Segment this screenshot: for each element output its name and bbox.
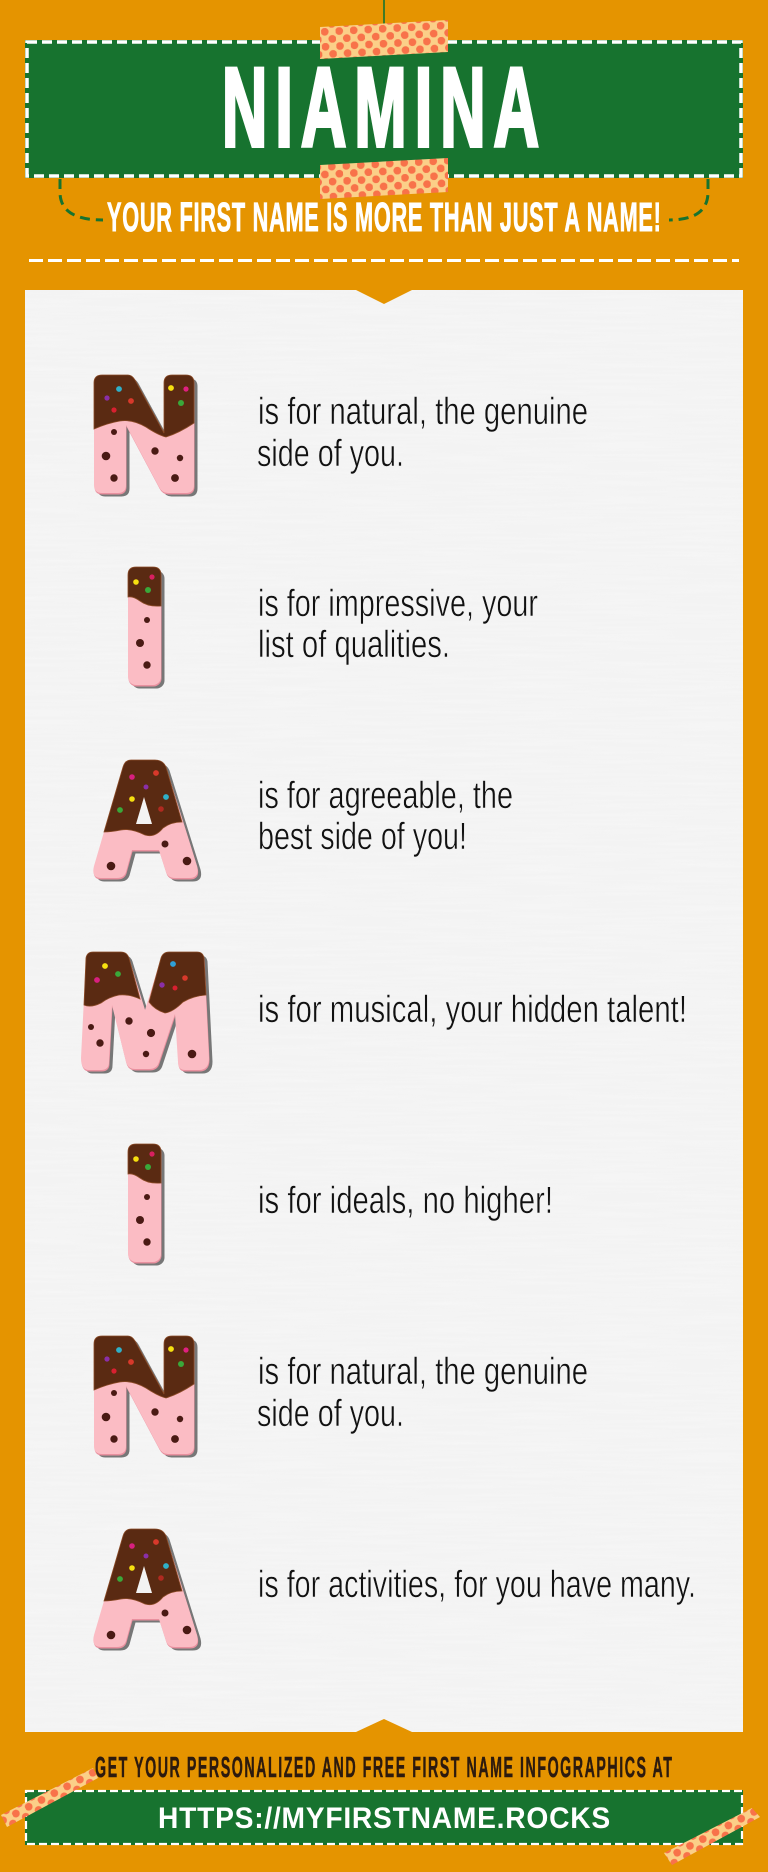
text row 6 [257,1351,588,1435]
text row 3: best side of you! [258,816,467,858]
subtitle: YOUR FIRST NAME IS MORE THAN JUST A NAME! [107,194,661,240]
letter M [81,952,212,1074]
text row 1: is for natural, the genuine [258,391,588,433]
tape: footer left [1,1768,98,1827]
letter A (2) [93,1529,201,1650]
thread [383,0,385,25]
letter N (1) [94,375,198,496]
footer call to action: GET YOUR PERSONALIZED AND FREE FIRST NAME INFOGRAPHICS AT [95,1752,672,1783]
text row 6: is for natural, the genuine [258,1351,588,1393]
tape: bottom [320,158,448,199]
dashed divider [29,259,739,262]
tape: footer right [664,1808,760,1865]
footer url: HTTPS://MYFIRSTNAME.ROCKS [158,1802,610,1835]
letter A (1) [93,760,201,882]
curved connector: left [60,179,103,220]
text row 2: is for impressive, your [258,583,538,625]
text row 3 [258,775,513,858]
text row 3: is for agreeable, the [258,775,513,817]
text row 2: list of qualities. [258,624,450,666]
text row 1: side of you. [257,433,404,475]
letter N (2) [94,1336,198,1458]
text row 1 [257,391,588,475]
tape: top [320,20,448,59]
footer banner [25,1790,743,1845]
letter I (2) [128,1144,164,1266]
text row 2 [258,583,538,666]
title: NIAMINA [222,46,539,171]
header banner [25,40,743,178]
text row 5: is for ideals, no higher! [258,1180,553,1222]
panel: letters [25,290,743,1732]
letter I (1) [128,567,164,688]
curved connector: right [669,179,708,220]
text row 6: side of you. [257,1393,404,1435]
